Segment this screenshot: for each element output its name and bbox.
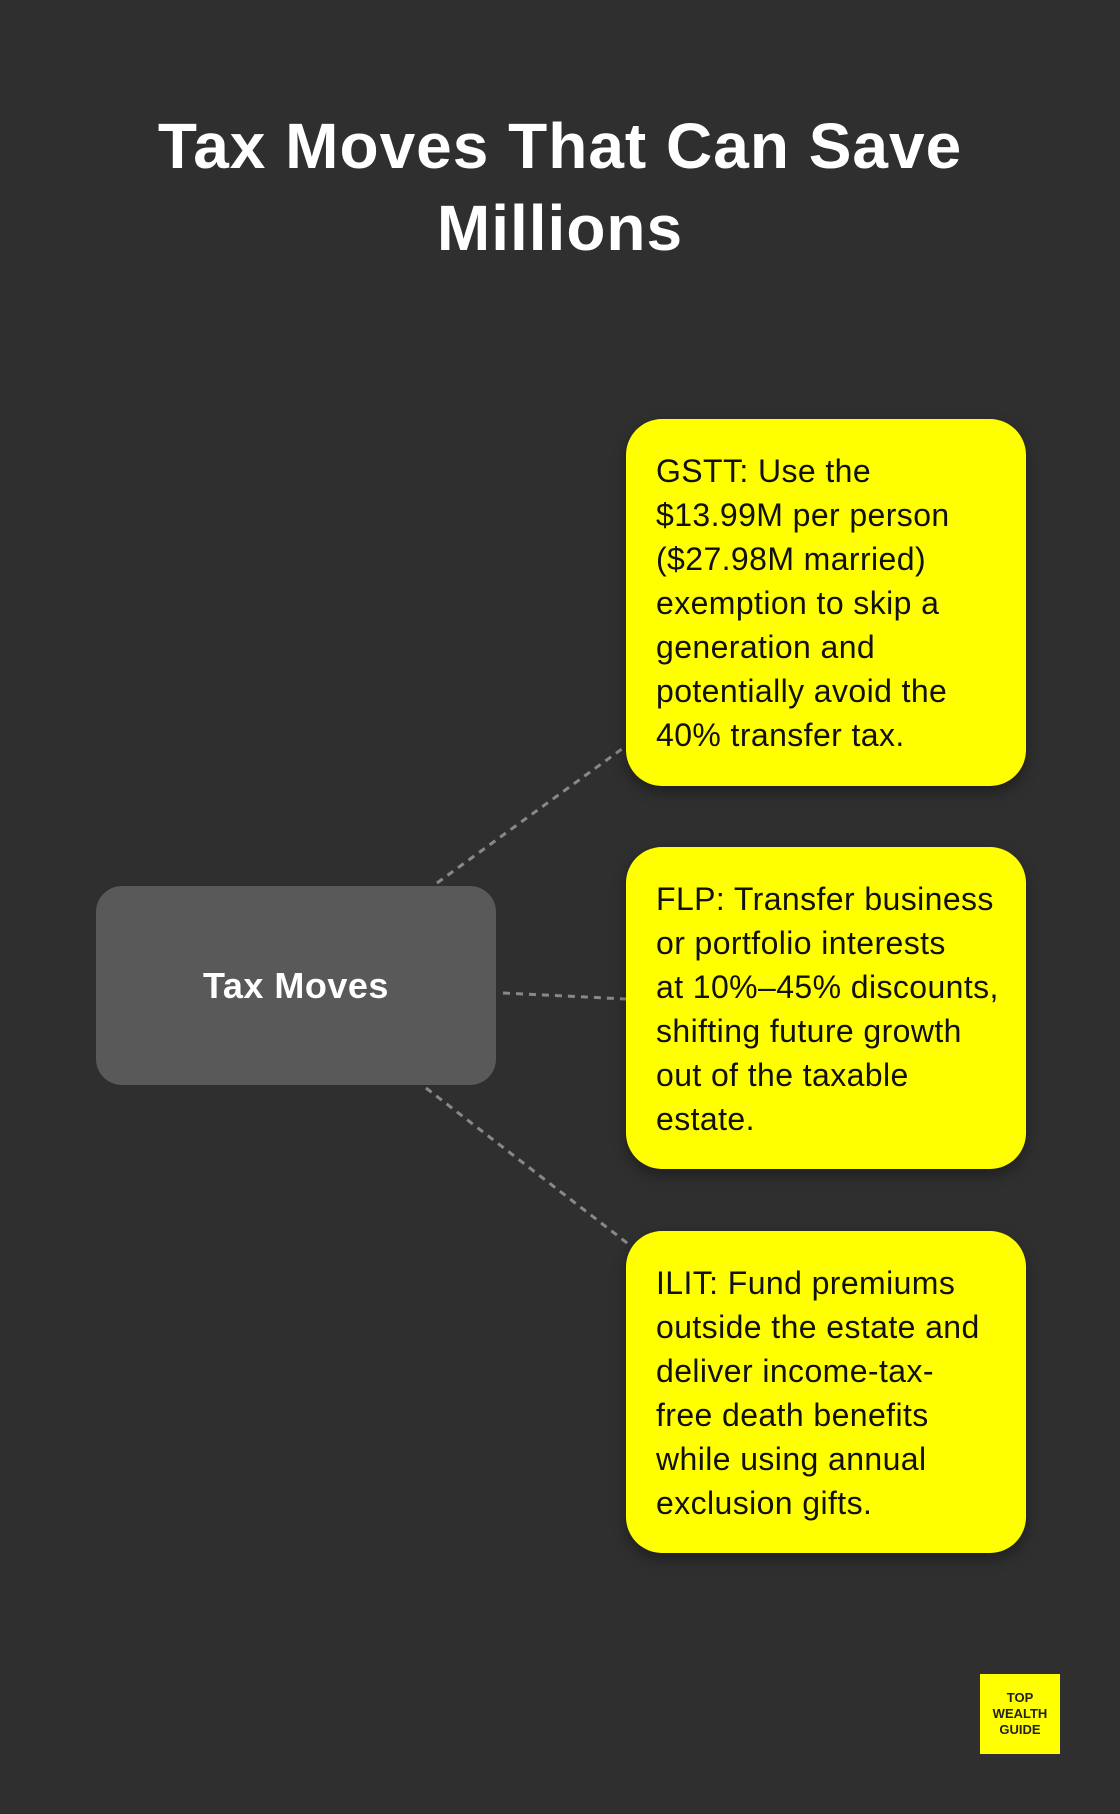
card: ILIT: exclusion gifts. — [656, 1485, 872, 1521]
card: GSTT — [626, 419, 1026, 786]
card: FLP: at 10%–45% discounts, — [656, 969, 999, 1005]
logo — [980, 1674, 1060, 1754]
card: ILIT: ILIT: Fund premiums — [656, 1265, 955, 1301]
card: FLP: out of the taxable — [656, 1057, 909, 1093]
logo: TOP — [1007, 1690, 1033, 1705]
hub: Tax Moves: Tax Moves — [203, 964, 389, 1006]
card: FLP: or portfolio interests — [656, 925, 946, 961]
logo: WEALTH — [993, 1706, 1047, 1721]
card: FLP: estate. — [656, 1101, 755, 1137]
card: FLP: shifting future growth — [656, 1013, 962, 1049]
card: GSTT: ($27.98M married) — [656, 541, 926, 577]
card: GSTT: $13.99M per person — [656, 497, 950, 533]
card: ILIT — [626, 1231, 1026, 1553]
card: GSTT: generation and — [656, 629, 875, 665]
card: GSTT: exemption to skip a — [656, 585, 939, 621]
card: GSTT: GSTT: Use the — [656, 453, 871, 489]
logo: GUIDE — [999, 1722, 1041, 1737]
card: GSTT: 40% transfer tax. — [656, 717, 905, 753]
card: ILIT: while using annual — [656, 1441, 926, 1477]
hub: Tax Moves — [96, 886, 496, 1085]
title — [158, 110, 962, 264]
card: ILIT: free death benefits — [656, 1397, 929, 1433]
card: GSTT: potentially avoid the — [656, 673, 947, 709]
title: Tax Moves That Can Save — [158, 110, 962, 182]
title: Millions — [437, 192, 683, 264]
card: FLP — [626, 847, 1026, 1169]
card: FLP: FLP: Transfer business — [656, 881, 994, 917]
card: ILIT: deliver income-tax- — [656, 1353, 934, 1389]
card: ILIT: outside the estate and — [656, 1309, 980, 1345]
